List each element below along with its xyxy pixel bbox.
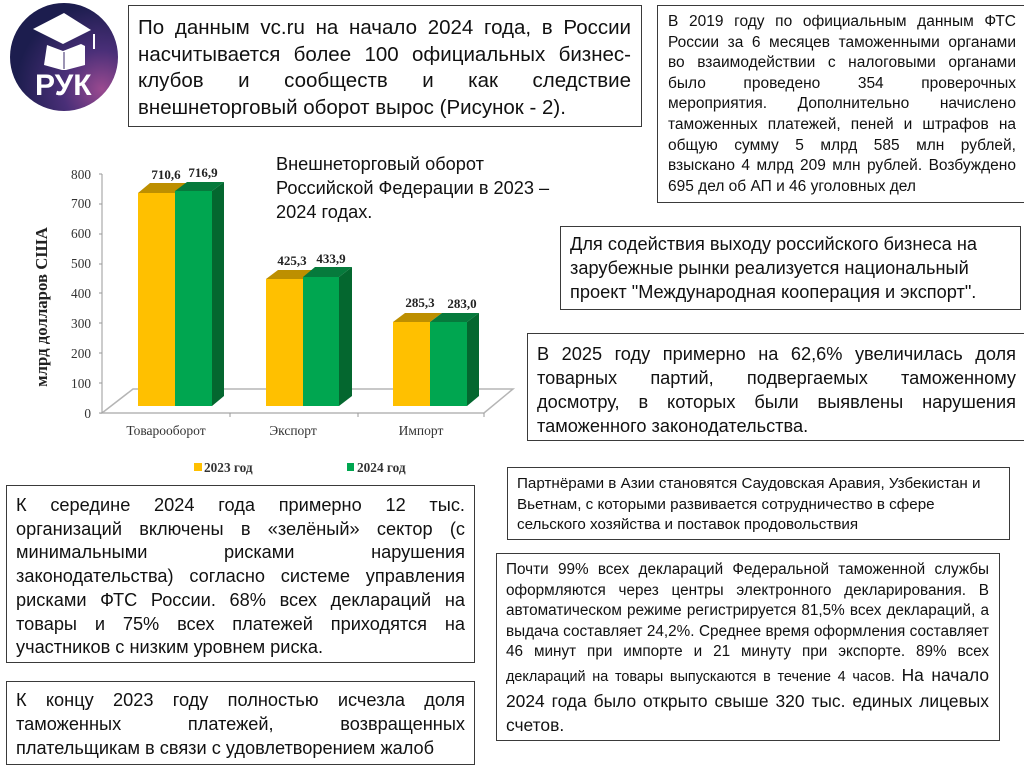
y axis labels: 500 xyxy=(71,256,91,271)
y axis labels: 700 xyxy=(71,196,91,211)
y axis labels: 300 xyxy=(71,316,91,331)
text box: 2025 customs inspection: таможенного законодательства. xyxy=(537,416,808,436)
text box: green sector: организаций включены в «зелёный» сектор (с xyxy=(16,519,465,539)
text box: business clubs: По данным vc.ru на начало 2024 года, в России xyxy=(138,16,631,39)
legend: 2023 год xyxy=(204,460,253,475)
y axis title: млрд долларов США xyxy=(32,227,51,387)
text box: electronic declarations: 46 минут при импорте и 21 минуту при экспорте. 89% всех xyxy=(506,643,989,660)
text box: national project xyxy=(560,226,1021,310)
chart title: Российской Федерации в 2023 – xyxy=(276,178,549,198)
text box: green sector: законодательства) согласно системе управления xyxy=(16,566,465,586)
text box: end of 2023: таможенных платежей, возвращенных xyxy=(16,714,465,734)
text box: business clubs: внешнеторговый оборот вырос (Рисунок - 2). xyxy=(138,96,566,119)
legend xyxy=(194,460,406,475)
text box: electronic declarations: 2024 года было открыто свыше 320 тыс. единых лицевых xyxy=(506,691,989,711)
text box: green sector: участников с низким уровнем риска. xyxy=(16,637,323,657)
y axis labels: 100 xyxy=(71,376,91,391)
text box: green sector: минимальными рисками нарушения xyxy=(16,542,465,562)
y axis labels: 800 xyxy=(71,167,91,182)
value labels: 433,9 xyxy=(316,251,346,266)
text box: green sector: товары и 75% всех платежей приходятся на xyxy=(16,614,465,634)
text box: electronic declarations: деклараций на товары выпускаются в течение 4 часов. На начало xyxy=(506,665,989,685)
text box: green sector xyxy=(6,485,475,663)
y axis labels: 600 xyxy=(71,226,91,241)
text box: end of 2023: К концу 2023 году полностью исчезла доля xyxy=(16,690,465,710)
logo: РУК graduation cap emblem: РУК xyxy=(35,69,92,102)
text box: 2019 customs checks: взыскано 4 млрд 209 млн рублей. Возбуждено xyxy=(668,157,1016,174)
text box: 2025 customs inspection xyxy=(527,333,1024,441)
text box: business clubs: насчитывается более 100 официальных бизнес- xyxy=(138,43,631,66)
text box: 2019 customs checks: В 2019 году по официальным данным ФТС xyxy=(668,13,1016,30)
y axis labels: 400 xyxy=(71,286,91,301)
value labels: 716,9 xyxy=(188,165,218,180)
text box: partners in Asia: Партнёрами в Азии становятся Саудовская Аравия, Узбекистан и xyxy=(517,475,980,492)
text box: 2025 customs inspection: В 2025 году примерно на 62,6% увеличилась доля xyxy=(537,344,1016,364)
category labels: Экспорт xyxy=(269,423,317,438)
category labels xyxy=(126,423,443,438)
text box: national project: зарубежные рынки реализуется национальный xyxy=(570,258,969,278)
y axis labels xyxy=(71,167,91,421)
text box: 2019 customs checks: мероприятия. Дополнительно начислено xyxy=(668,95,1016,112)
text box: electronic declarations: Почти 99% всех деклараций Федеральной таможенной службы xyxy=(506,561,989,578)
text box: 2019 customs checks: было проведено 354 проверочных xyxy=(668,75,1016,92)
text box: green sector: К середине 2024 года примерно 12 тыс. xyxy=(16,495,465,515)
value labels xyxy=(151,165,477,311)
text box: 2019 customs checks: во взаимодействии с налоговыми органами xyxy=(668,54,1016,71)
text box: national project: Для содействия выходу российского бизнеса на xyxy=(570,234,977,254)
text box: 2019 customs checks: таможенных платежей, пеней и штрафов на xyxy=(668,116,1016,133)
text box: electronic declarations xyxy=(496,553,1000,741)
category labels: Товарооборот xyxy=(126,423,206,438)
text box: 2019 customs checks: общую сумму 5 млрд 585 млн рублей, xyxy=(668,137,1016,154)
value labels: 285,3 xyxy=(405,295,435,310)
text box: 2025 customs inspection: досмотру, в которых были выявлены нарушения xyxy=(537,392,1016,412)
text box: electronic declarations: оформляются через центры электронного декларирования. В xyxy=(506,582,989,599)
chart title: 2024 годах. xyxy=(276,202,372,222)
text box: partners in Asia: сельского хозяйства и поставок продовольствия xyxy=(517,516,858,533)
y axis labels: 200 xyxy=(71,346,91,361)
legend: 2024 год xyxy=(357,460,406,475)
bars: Товарооборот xyxy=(138,182,224,406)
value labels: 425,3 xyxy=(277,253,307,268)
text box: 2019 customs checks xyxy=(657,5,1024,203)
text box: business clubs: клубов и сообществ и как следствие xyxy=(138,69,631,92)
text box: 2019 customs checks: России за 6 месяцев таможенными органами xyxy=(668,34,1016,51)
text box: electronic declarations: автоматическом режиме регистрируется 81,5% всех деклараций, а xyxy=(506,602,989,619)
text box: 2025 customs inspection: товарных партий, подвергаемых таможенному xyxy=(537,368,1016,388)
text box: partners in Asia: Вьетнам, с которыми развивается сотрудничество в сфере xyxy=(517,496,935,512)
category labels: Импорт xyxy=(399,423,443,438)
bar chart: foreign trade turnover xyxy=(32,165,515,475)
chart title: Внешнеторговый оборот xyxy=(276,154,484,174)
y axis labels: 0 xyxy=(84,406,91,421)
bars: Экспорт xyxy=(266,267,352,406)
text box: electronic declarations: счетов. xyxy=(506,715,564,735)
text box: 2019 customs checks: 695 дел об АП и 46 уголовных дел xyxy=(668,178,916,195)
text box: national project: проект "Международная кооперация и экспорт". xyxy=(570,282,976,302)
text box: end of 2023 xyxy=(6,681,475,765)
value labels: 710,6 xyxy=(151,167,181,182)
text box: green sector: рисками ФТС России. 68% всех деклараций на xyxy=(16,590,465,610)
text box: partners in Asia xyxy=(507,467,1010,540)
text box: business clubs xyxy=(128,5,642,127)
bars: Импорт xyxy=(393,313,479,406)
text box: end of 2023: плательщикам в связи с удовлетворением жалоб xyxy=(16,738,434,758)
chart title xyxy=(276,154,550,222)
text box: electronic declarations: выдача составляет 24,2%. Среднее время оформления составляет xyxy=(506,623,989,640)
value labels: 283,0 xyxy=(447,296,477,311)
logo: РУК graduation cap emblem xyxy=(10,3,118,111)
